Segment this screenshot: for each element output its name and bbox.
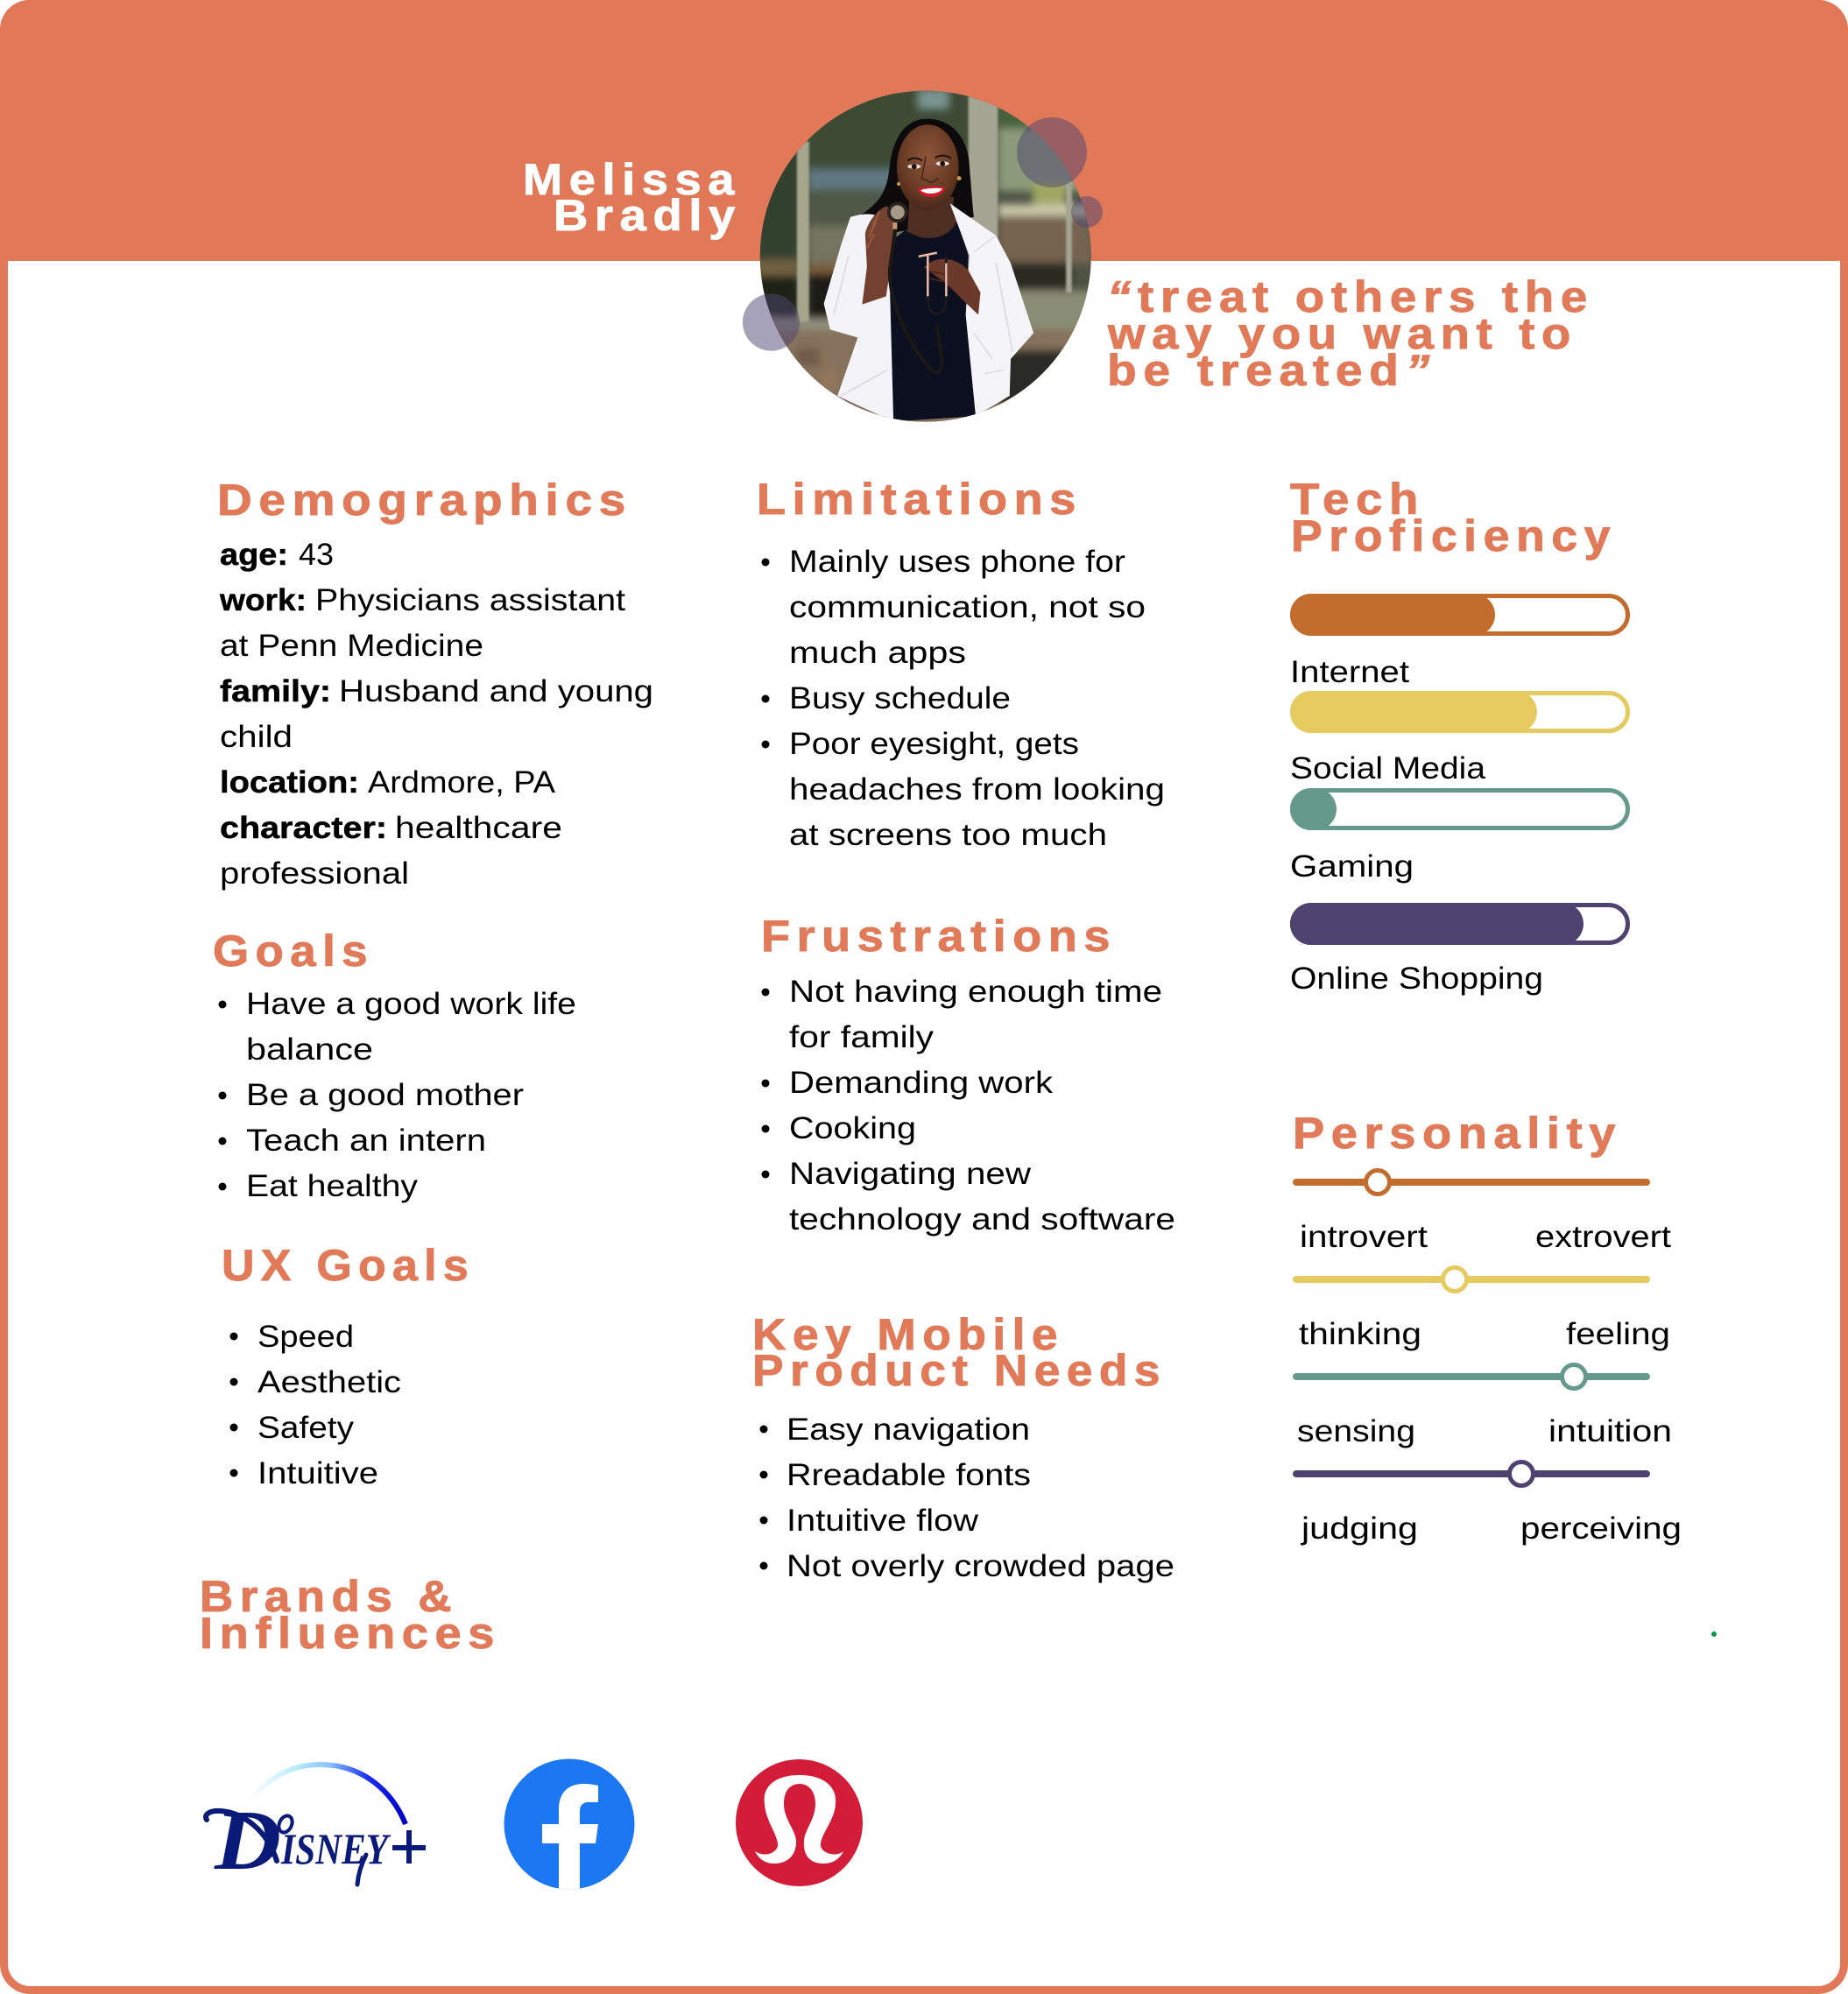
limitations list: Busy schedule bbox=[789, 680, 1011, 715]
bar: internet bbox=[1290, 594, 1627, 689]
key mobile needs list: Easy navigation bbox=[786, 1412, 1030, 1447]
demographics text: 43 bbox=[299, 537, 334, 572]
heading: brands and influences: Influences bbox=[200, 1609, 501, 1658]
demographics text: professional bbox=[220, 856, 409, 891]
heading: brands and influences: Brands & bbox=[200, 1572, 458, 1621]
UX goals list: Aesthetic bbox=[257, 1364, 401, 1399]
demographics text bbox=[219, 537, 653, 891]
panel: frustrations bbox=[761, 912, 1175, 1237]
key mobile needs list: Not overly crowded page bbox=[786, 1548, 1174, 1583]
demographics text: work: bbox=[219, 582, 307, 617]
heading: UX goals: UX Goals bbox=[222, 1241, 475, 1290]
icon: disney plus logo bbox=[206, 1765, 426, 1888]
limitations list: communication, not so bbox=[789, 589, 1146, 624]
heading: tech proficiency: Proficiency bbox=[1291, 511, 1617, 560]
heading: limitations: Limitations bbox=[757, 475, 1083, 524]
hair bbox=[862, 119, 974, 234]
goals list: Teach an intern bbox=[246, 1123, 486, 1158]
stethoscope bbox=[890, 226, 942, 372]
goals list: Have a good work life bbox=[246, 986, 576, 1021]
panel: personality bbox=[1293, 1109, 1682, 1546]
panel: tech proficiency bbox=[1290, 475, 1627, 996]
face bbox=[897, 124, 959, 210]
panel: limitations bbox=[757, 475, 1165, 852]
heading: goals: Goals bbox=[213, 927, 374, 976]
UX goals list bbox=[229, 1319, 401, 1490]
frustrations list: technology and software bbox=[789, 1201, 1175, 1237]
quote: way you want to bbox=[1107, 309, 1577, 358]
panel: goals bbox=[213, 927, 576, 1203]
bar: social media bbox=[1290, 691, 1627, 786]
neck bbox=[907, 197, 959, 240]
name: Bradly bbox=[554, 191, 742, 240]
heading: key mobile product needs: Product Needs bbox=[752, 1346, 1167, 1395]
frustrations list: Not having enough time bbox=[789, 974, 1162, 1009]
demographics text: Ardmore, PA bbox=[368, 764, 555, 800]
key mobile needs list bbox=[760, 1412, 1174, 1583]
frustrations list bbox=[762, 974, 1175, 1237]
quote: be treated ” bbox=[1107, 346, 1436, 395]
quote bbox=[1107, 272, 1594, 395]
bar: social media: Social Media bbox=[1290, 750, 1485, 786]
limitations list bbox=[762, 544, 1165, 852]
icon: facebook logo bbox=[504, 1758, 634, 1892]
demographics text: child bbox=[220, 719, 293, 754]
slider: sensing to intuition: sensing bbox=[1297, 1413, 1415, 1448]
icon: disney plus logo: D bbox=[214, 1793, 281, 1888]
UX goals list: Intuitive bbox=[257, 1455, 378, 1490]
slider: thinking to feeling bbox=[1296, 1268, 1670, 1351]
demographics text: family: bbox=[220, 673, 331, 708]
demographics text: healthcare bbox=[395, 810, 562, 845]
slider: judging to perceiving bbox=[1296, 1462, 1682, 1546]
green speck bbox=[1711, 1631, 1717, 1637]
frustrations list: Demanding work bbox=[789, 1065, 1053, 1100]
portrait photo bbox=[757, 86, 1096, 426]
left hand bbox=[862, 206, 897, 305]
key mobile needs list: Intuitive flow bbox=[786, 1503, 978, 1538]
panel: brands and influences bbox=[200, 1572, 863, 1892]
heading: demographics: Demographics bbox=[217, 476, 632, 525]
slider: thinking to feeling: feeling bbox=[1566, 1316, 1670, 1351]
panel: UX goals bbox=[222, 1241, 475, 1490]
bar: internet: Internet bbox=[1290, 654, 1409, 689]
heading: frustrations: Frustrations bbox=[761, 912, 1117, 961]
heading: tech proficiency: Tech bbox=[1290, 475, 1425, 524]
slider: introvert to extrovert: extrovert bbox=[1535, 1219, 1671, 1254]
icon: lululemon logo bbox=[736, 1759, 863, 1886]
bar: online shopping bbox=[1290, 903, 1627, 996]
demographics text: at Penn Medicine bbox=[220, 628, 483, 663]
heading: key mobile product needs bbox=[752, 1310, 1167, 1395]
demographics text: character: bbox=[220, 810, 387, 845]
bar: gaming bbox=[1290, 788, 1627, 884]
limitations list: headaches from looking bbox=[789, 772, 1165, 807]
key mobile needs list: Rreadable fonts bbox=[786, 1457, 1031, 1492]
panel: key mobile product needs bbox=[752, 1310, 1174, 1583]
demographics text: Husband and young bbox=[339, 673, 653, 708]
quote: “treat others the bbox=[1107, 272, 1594, 321]
limitations list: Mainly uses phone for bbox=[789, 544, 1125, 579]
heading: brands and influences bbox=[200, 1572, 501, 1658]
panel: demographics bbox=[217, 476, 653, 891]
slider: judging to perceiving: perceiving bbox=[1520, 1511, 1682, 1546]
limitations list: Poor eyesight, gets bbox=[789, 726, 1079, 761]
icon: disney plus logo: ISNEY bbox=[280, 1824, 391, 1873]
name bbox=[523, 155, 742, 240]
UX goals list: Safety bbox=[257, 1410, 354, 1445]
demographics text: age: bbox=[220, 537, 288, 572]
right hand bbox=[924, 259, 980, 314]
slider: introvert to extrovert bbox=[1296, 1170, 1671, 1254]
demographics text: Physicians assistant bbox=[315, 582, 625, 617]
frustrations list: for family bbox=[789, 1019, 934, 1054]
heading: personality: Personality bbox=[1293, 1109, 1622, 1158]
header band bbox=[0, 0, 1848, 261]
goals list: balance bbox=[246, 1032, 373, 1067]
limitations list: much apps bbox=[789, 635, 966, 670]
name: Melissa bbox=[523, 155, 741, 204]
slider: introvert to extrovert: introvert bbox=[1300, 1219, 1428, 1254]
slider: sensing to intuition: intuition bbox=[1548, 1413, 1672, 1448]
heading: tech proficiency bbox=[1290, 475, 1617, 560]
slider: thinking to feeling: thinking bbox=[1299, 1316, 1421, 1351]
UX goals list: Speed bbox=[257, 1319, 354, 1354]
frustrations list: Cooking bbox=[789, 1110, 916, 1145]
goals list bbox=[219, 986, 576, 1203]
bar: gaming: Gaming bbox=[1290, 849, 1414, 884]
frustrations list: Navigating new bbox=[789, 1156, 1031, 1191]
goals list: Eat healthy bbox=[246, 1168, 418, 1203]
bar: online shopping: Online Shopping bbox=[1290, 961, 1543, 996]
dress bbox=[887, 221, 976, 421]
limitations list: at screens too much bbox=[789, 817, 1107, 852]
slider: sensing to intuition bbox=[1296, 1364, 1672, 1448]
slider: judging to perceiving: judging bbox=[1301, 1511, 1418, 1546]
demographics text: location: bbox=[220, 764, 359, 800]
decorative bubbles bbox=[743, 117, 1103, 351]
goals list: Be a good mother bbox=[246, 1077, 524, 1112]
coat bbox=[824, 215, 893, 421]
heading: key mobile product needs: Key Mobile bbox=[752, 1310, 1064, 1359]
